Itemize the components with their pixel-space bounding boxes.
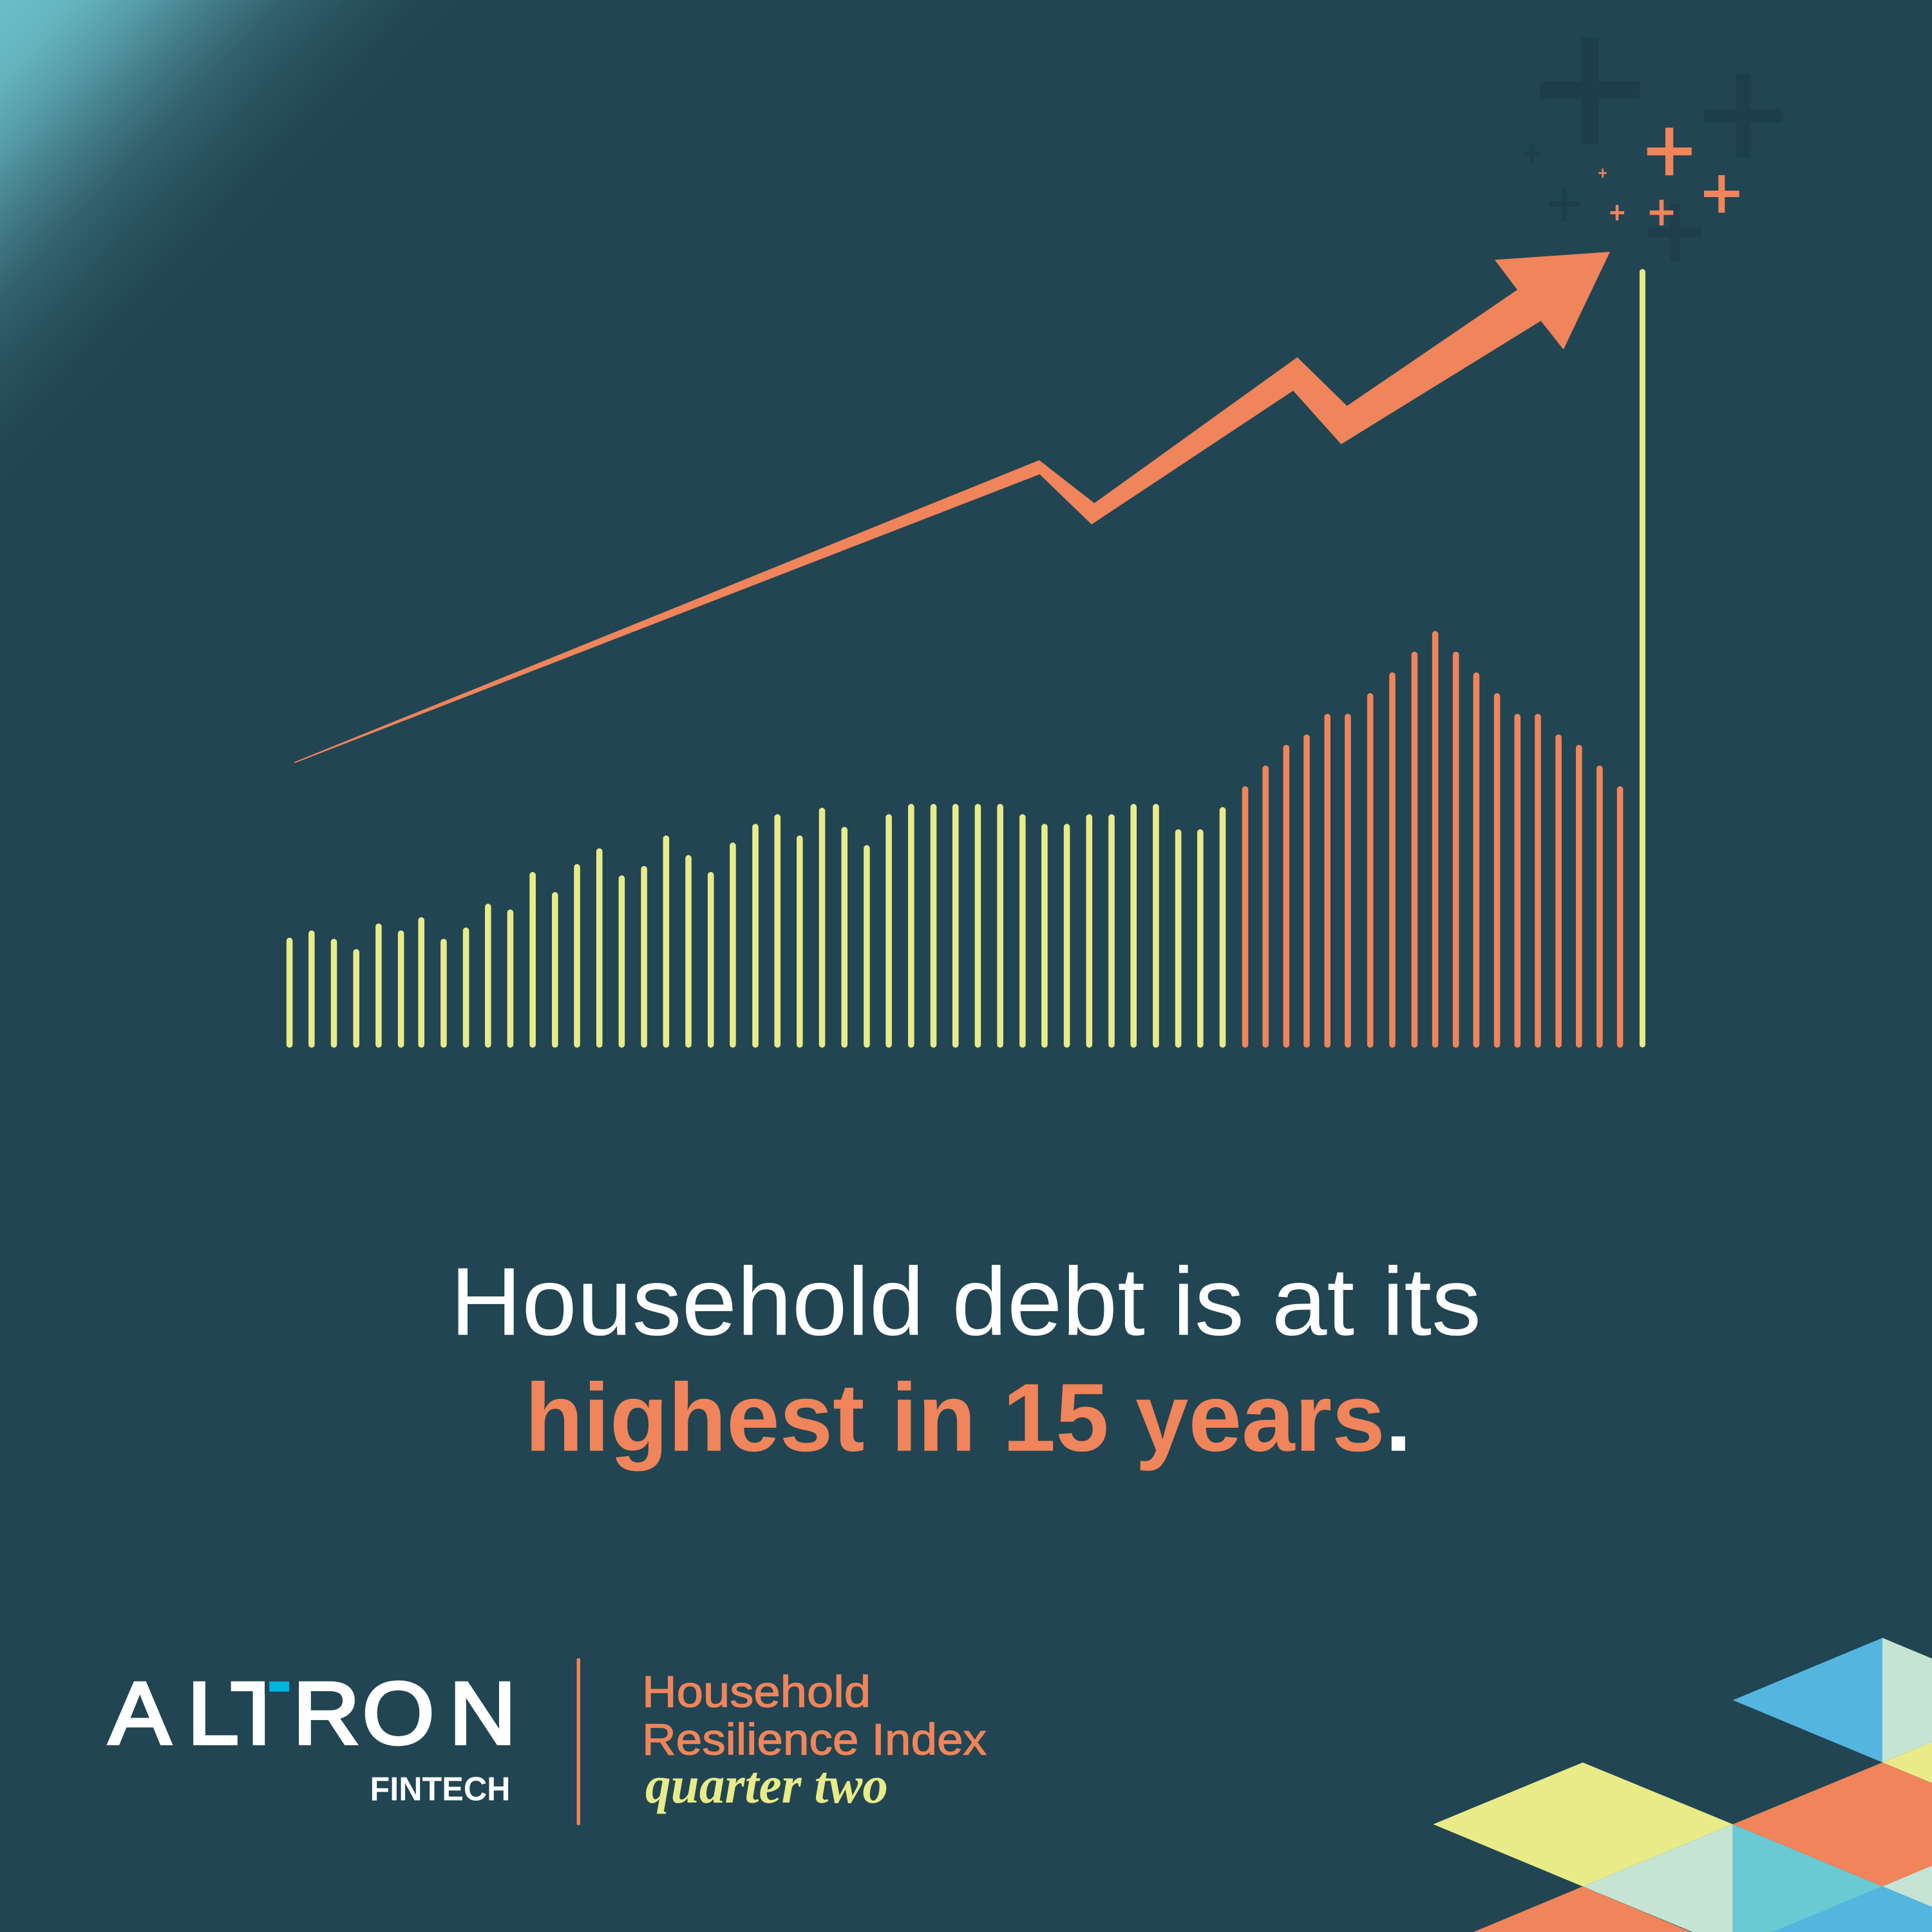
tall yellow bar [1640,272,1645,1045]
dark plus signs [1524,37,1782,261]
quarter label: quarter two [645,1756,888,1814]
logo gap [265,1678,294,1694]
yellow diamond [1434,1763,1733,1886]
plus signs cluster [1524,37,1782,261]
bar chart [290,272,1642,1045]
title line one: Household [642,1667,871,1717]
logo wordmark: ALTRON [109,1664,516,1763]
rising arrow [294,252,1610,763]
logo divider [577,1658,580,1825]
geometric triangle pattern [1434,1638,1932,1932]
mint triangle centre [1583,1824,1733,1932]
mint triangle right [1882,1866,1932,1907]
orange triangle bottom [1473,1886,1691,1932]
blue triangle bottom [1772,1886,1932,1932]
orange diamond [1733,1763,1932,1886]
report title [642,1667,987,1814]
headline line one: Household debt is at its [450,1247,1481,1356]
orange plus signs [1598,128,1739,225]
mint triangle top [1882,1638,1932,1763]
yellow bars [290,807,1223,1045]
Altron Fintech logo [109,1664,516,1808]
logo blue square [269,1681,289,1692]
orange bars [1245,634,1620,1045]
teal triangle [1733,1824,1882,1932]
headline [450,1247,1481,1472]
title line two: Resilience Index [642,1715,987,1765]
yellow triangle right [1882,1742,1932,1783]
headline line two: highest in 15 years. [525,1363,1412,1472]
logo sub-brand: FINTECH [370,1771,510,1808]
corner light glow [0,0,515,515]
blue triangle top [1733,1638,1882,1763]
